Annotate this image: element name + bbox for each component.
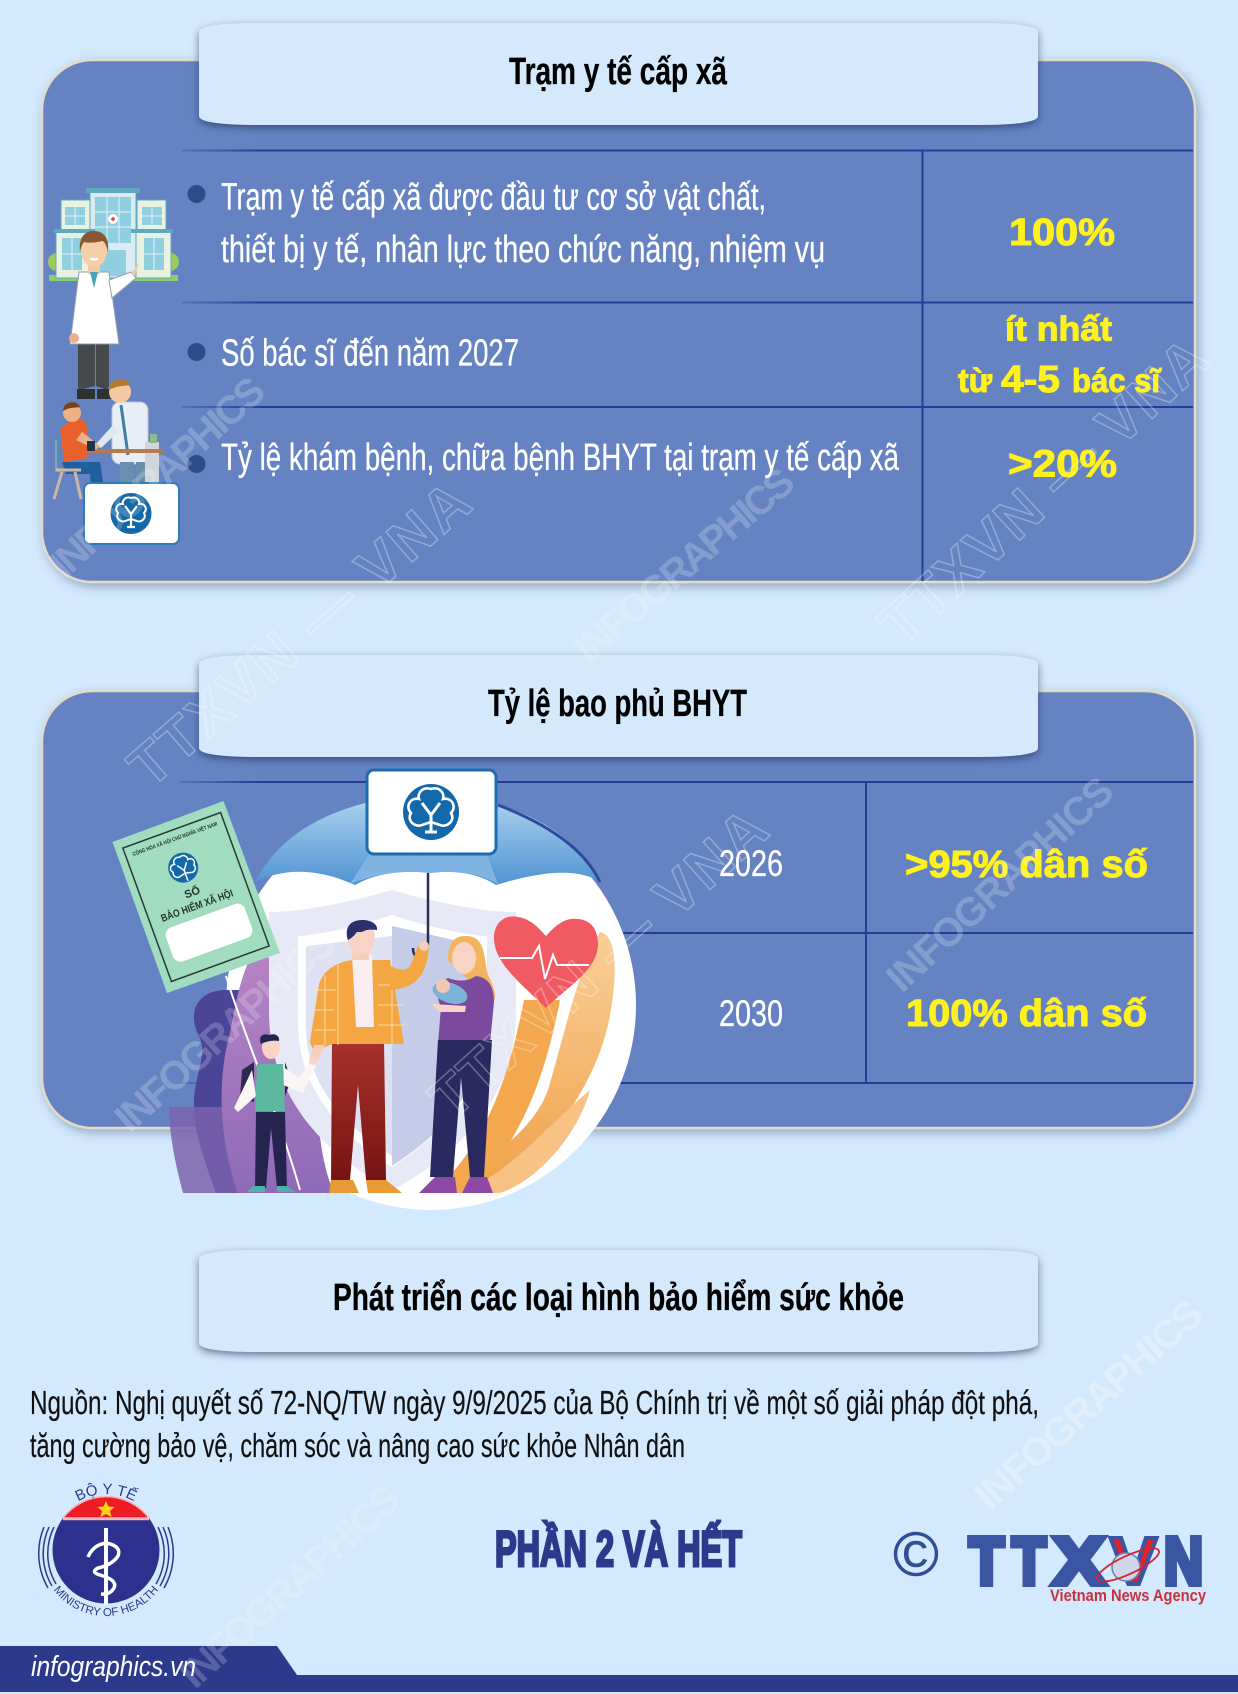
- years and coverage values: 2026: [719, 843, 783, 884]
- logo: TTXVN: Vietnam News Agency: [1050, 1586, 1206, 1605]
- footer bar: [0, 1646, 1238, 1692]
- heart: [494, 916, 598, 1008]
- logo: Bộ Y tế: MINISTRY OF HEALTH: [54, 1586, 158, 1616]
- logo: Bộ Y tế: [38, 1482, 174, 1616]
- mother with baby: [419, 936, 495, 1193]
- sign: BHYT logo: [367, 770, 496, 854]
- watermarks: INFOGRAPHICS: [566, 459, 803, 671]
- years and coverage values: 2030: [719, 993, 783, 1034]
- icon: copyright: ©: [893, 1520, 939, 1590]
- bullet list: Tỷ lệ khám bệnh, chữa bệnh BHYT tại trạm y tế cấp xã: [221, 437, 900, 479]
- years and coverage values: 100% dân số: [906, 993, 1147, 1035]
- bullet list: Số bác sĩ đến năm 2027: [221, 332, 519, 374]
- heading tab: Tỷ lệ bao phủ BHYT: Tỷ lệ bao phủ BHYT: [488, 683, 747, 725]
- watermarks: TTXVN — VNA: [417, 796, 780, 1132]
- values column: ít nhất: [1005, 310, 1112, 348]
- watermarks: INFOGRAPHICS: [172, 1477, 409, 1694]
- logo: TTXVN: V: [1110, 1524, 1157, 1599]
- watermarks: INFOGRAPHICS: [41, 368, 274, 587]
- heading tab: Trạm y tế cấp xã: [199, 23, 1038, 125]
- heading tab: Phát triển các loại hình bảo hiểm sức khỏe: [199, 1250, 1038, 1352]
- values column: 4-5: [1001, 359, 1060, 401]
- values column: bác sĩ: [1072, 362, 1162, 399]
- heading tab: Trạm y tế cấp xã: Trạm y tế cấp xã: [509, 51, 728, 93]
- source note: tăng cường bảo vệ, chăm sóc và nâng cao sức khỏe Nhân dân: [30, 1427, 685, 1464]
- bullet list: [188, 176, 900, 479]
- values column: từ: [958, 362, 992, 399]
- umbrella: [255, 792, 600, 958]
- watermarks: INFOGRAPHICS: [878, 769, 1122, 1001]
- illustration: doctor examining patient: [54, 379, 163, 499]
- watermarks: INFOGRAPHICS: [107, 921, 344, 1141]
- source note: [30, 1384, 1039, 1464]
- watermarks: INFOGRAPHICS: [967, 1292, 1212, 1519]
- bullet list: thiết bị y tế, nhân lực theo chức năng, nhiệm vụ: [221, 229, 825, 271]
- logo: TTXVN: T: [969, 1524, 1004, 1599]
- values column: [958, 212, 1162, 486]
- shield: [269, 890, 516, 1190]
- panel: Trạm y tế cấp xã: [42, 60, 1195, 582]
- heading tab: Tỷ lệ bao phủ BHYT: [199, 655, 1038, 757]
- social insurance book: SỔ: [183, 884, 202, 901]
- social insurance book: CỘNG HÒA XÃ HỘI CHỦ NGHĨA VIỆT NAM: [131, 819, 219, 858]
- heading tab: Phát triển các loại hình bảo hiểm sức khỏe: Phát triển các loại hình bảo hiểm sức khỏe: [333, 1277, 904, 1319]
- part label: PHẦN 2 VÀ HẾT: [495, 1521, 742, 1577]
- watermarks: TTXVN — VNA: [867, 325, 1221, 658]
- illustration: family under BHYT umbrella: [112, 770, 636, 1210]
- social insurance book: [112, 801, 280, 993]
- boy with backpack: [234, 1034, 317, 1192]
- orange leaves: [432, 932, 615, 1193]
- values column: 100%: [1009, 212, 1115, 254]
- logo: Bộ Y tế: BỘ Y TẾ: [74, 1482, 139, 1501]
- logo: TTXVN: T: [1012, 1524, 1046, 1599]
- logo: TTXVN: X: [1053, 1524, 1105, 1599]
- values column: >20%: [1008, 444, 1117, 486]
- logo: TTXVN: [969, 1524, 1206, 1605]
- bullet list: Trạm y tế cấp xã được đầu tư cơ sở vật chất,: [221, 176, 766, 218]
- icon: BHYT logo card: [84, 483, 179, 544]
- logo: TTXVN: N: [1164, 1524, 1203, 1599]
- watermarks: TTXVN — VNA: [116, 469, 483, 800]
- years and coverage values: [719, 843, 1148, 1035]
- white circle backdrop: [226, 800, 636, 1210]
- years and coverage values: >95% dân số: [905, 844, 1148, 886]
- watermarks: [41, 325, 1221, 1694]
- footer website: infographics.vn: [31, 1651, 196, 1683]
- father: [310, 920, 429, 1193]
- panel: Tỷ lệ bao phủ BHYT: [42, 691, 1195, 1128]
- illustration: hospital and doctor: [48, 188, 179, 399]
- social insurance book: BẢO HIỂM XÃ HỘI: [159, 887, 235, 925]
- purple leaves: [169, 950, 334, 1193]
